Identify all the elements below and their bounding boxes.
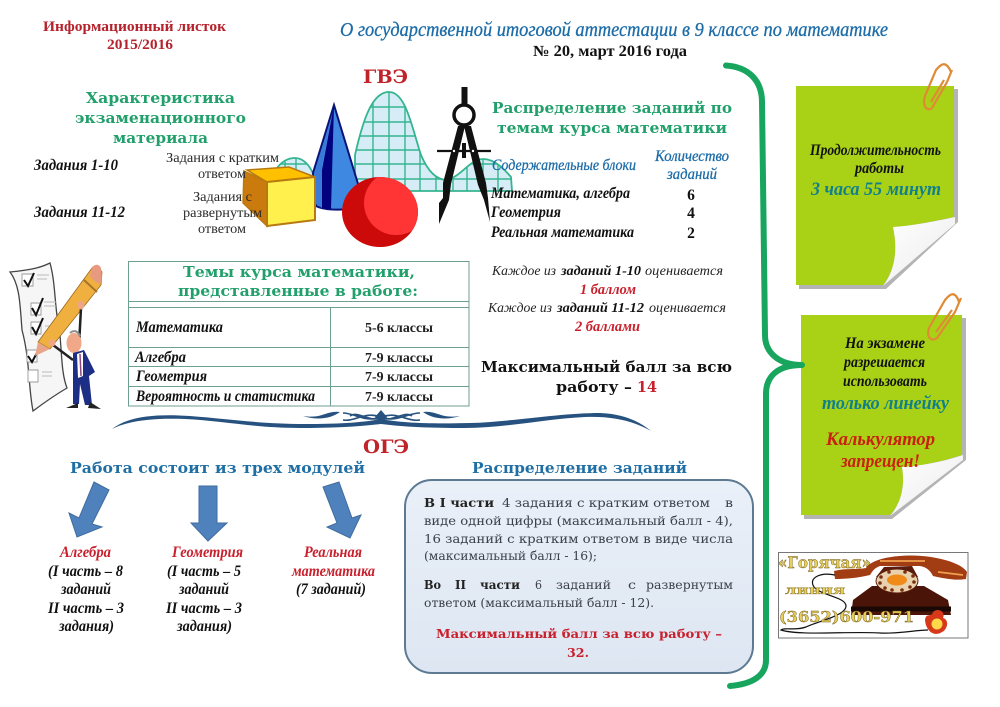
table rows: subjects: Геометрия bbox=[135, 368, 207, 385]
table rows: grades bbox=[365, 320, 433, 404]
OGE maximum score: 32. bbox=[567, 645, 589, 660]
topic rows bbox=[490, 185, 695, 242]
text block: scoring rules bbox=[487, 264, 726, 335]
arrow: to real mathematics bbox=[323, 482, 361, 538]
text block: scoring rules: 2 баллами bbox=[574, 319, 640, 335]
note text: использовать bbox=[843, 373, 927, 390]
labels: task types: развернутым bbox=[183, 205, 262, 220]
note text: 3 часа 55 минут bbox=[810, 179, 941, 200]
text block: GVE maximum score bbox=[481, 358, 732, 396]
heading: GVE: ГВЭ bbox=[363, 66, 408, 88]
part two text: 6 bbox=[535, 578, 542, 592]
heading: OGE: ОГЭ bbox=[363, 436, 409, 458]
hotline text: «Горячая» bbox=[778, 553, 871, 572]
part two text: с bbox=[628, 578, 636, 592]
text block: GVE maximum score: Максимальный балл за всю bbox=[481, 358, 732, 376]
part one text bbox=[424, 496, 733, 563]
module: algebra: Алгебра bbox=[59, 544, 111, 561]
note: duration bbox=[796, 64, 958, 289]
column headers: Количество bbox=[654, 148, 729, 165]
module: real mathematics: (7 заданий) bbox=[296, 581, 366, 598]
pencil bbox=[35, 265, 102, 356]
icon: cube bbox=[243, 167, 315, 226]
labels: task numbers: Задания 11-12 bbox=[33, 204, 125, 221]
column headers: Содержательные блоки bbox=[492, 157, 636, 174]
text block: GVE maximum score: 14 bbox=[637, 378, 657, 396]
module: geometry: заданий bbox=[178, 581, 229, 598]
heading: exam material characteristics: Характеристика bbox=[86, 89, 235, 107]
module: algebra: II часть – 3 bbox=[47, 600, 124, 617]
heading: exam material characteristics: материала bbox=[113, 129, 208, 147]
topic rows: 4 bbox=[687, 205, 695, 222]
text block: scoring rules: оценивается bbox=[645, 264, 723, 279]
column headers: заданий bbox=[666, 166, 717, 183]
part two text: ответом (максимальный балл - 12). bbox=[424, 596, 654, 610]
note text bbox=[822, 335, 950, 472]
sticky note sheet bbox=[801, 315, 966, 519]
part one text: 4 задания с кратким ответом bbox=[502, 496, 710, 510]
module: geometry: (I часть – 5 bbox=[167, 563, 241, 580]
part one text: виде одной цифры (максимальный балл - 4), bbox=[424, 514, 733, 528]
part one text: в bbox=[725, 496, 733, 510]
table rows: grades: 5-6 классы bbox=[365, 320, 433, 335]
heading: exam material characteristics: экзаменационного bbox=[75, 109, 246, 127]
part two text: части bbox=[480, 578, 520, 592]
panel: topics table bbox=[128, 262, 469, 406]
text block: scoring rules: 1 баллом bbox=[580, 282, 636, 298]
heading: distribution of tasks: Распределение заданий bbox=[472, 460, 687, 477]
part two text: II bbox=[455, 578, 466, 592]
table rows: subjects: Алгебра bbox=[134, 349, 186, 366]
checklist paper bbox=[10, 263, 67, 411]
table heading: представленные в работе: bbox=[178, 282, 418, 300]
labels: task types: Задания с кратким bbox=[166, 150, 279, 165]
hotline text bbox=[778, 553, 914, 626]
heading: distribution of tasks by course topics bbox=[492, 99, 732, 137]
module: algebra: (I часть – 8 bbox=[48, 563, 123, 580]
heading: distribution of tasks by course topics: Распределение заданий по bbox=[492, 99, 732, 117]
module: algebra: задания) bbox=[58, 618, 114, 635]
part one text: В I части bbox=[424, 496, 494, 510]
topic rows: 6 bbox=[687, 187, 695, 204]
part two text: развернутым bbox=[646, 578, 733, 592]
text block: scoring rules: заданий 1-10 bbox=[560, 264, 641, 279]
part two text: заданий bbox=[556, 578, 611, 592]
table heading: Темы курса математики, bbox=[183, 263, 415, 281]
OGE maximum score bbox=[436, 626, 722, 660]
module: real mathematics bbox=[291, 544, 375, 598]
part one text: (максимальный балл - 16); bbox=[424, 549, 597, 563]
icon: sphere bbox=[342, 177, 418, 247]
labels: task types: Задания с bbox=[193, 189, 252, 204]
module: algebra: заданий bbox=[60, 581, 111, 598]
note text: Калькулятор bbox=[825, 429, 935, 450]
OGE maximum score: Максимальный балл за всю работу – bbox=[436, 626, 722, 641]
labels: task numbers: Задания 1-10 bbox=[33, 157, 118, 174]
panel: OGE task distribution bbox=[405, 480, 753, 673]
module: algebra bbox=[47, 544, 124, 635]
main title: № 20, март 2016 года bbox=[533, 43, 687, 60]
module: real mathematics: математика bbox=[291, 563, 375, 580]
note text: разрешается bbox=[842, 354, 925, 371]
labels: task types bbox=[166, 150, 279, 236]
topic rows: 2 bbox=[687, 225, 695, 242]
table rows: grades: 7-9 классы bbox=[365, 369, 433, 384]
note text: только линейку bbox=[822, 393, 950, 414]
icon: cone bbox=[313, 105, 362, 210]
panel: hotline bbox=[778, 552, 968, 638]
table rows: subjects: Вероятность и статистика bbox=[135, 388, 315, 405]
note text: На экзамене bbox=[844, 335, 925, 352]
note text: Продолжительность bbox=[809, 142, 941, 159]
part one text: 16 заданий с кратким ответом в виде числа bbox=[424, 532, 733, 546]
main title bbox=[340, 19, 888, 60]
header label: information sheet bbox=[43, 19, 226, 53]
text block: scoring rules: Каждое из bbox=[487, 301, 553, 316]
table rows: grades: 7-9 классы bbox=[365, 389, 433, 404]
text block: scoring rules: оценивается bbox=[649, 301, 726, 316]
arrow: to algebra bbox=[69, 482, 109, 537]
labels: task types: ответом bbox=[198, 221, 246, 236]
icon: paperclip bbox=[924, 64, 952, 109]
graphic: bell curve chart bbox=[270, 90, 520, 191]
table rows: subjects bbox=[134, 319, 315, 405]
part two text: Во bbox=[424, 578, 441, 592]
heading: exam material characteristics bbox=[75, 89, 246, 147]
main title: О государственной итоговой аттестации в 9 классе по математике bbox=[340, 19, 888, 41]
icon: paperclip bbox=[928, 294, 961, 340]
labels: task types: ответом bbox=[198, 166, 246, 181]
icon: compass bbox=[437, 87, 491, 224]
table rows: grades: 7-9 классы bbox=[365, 350, 433, 365]
hotline text: (3652)600-971 bbox=[779, 608, 914, 626]
topic rows: Геометрия bbox=[490, 204, 561, 221]
table rows: subjects: Математика bbox=[135, 319, 223, 336]
hotline text: линия bbox=[785, 583, 845, 597]
green curly brace bbox=[726, 66, 802, 686]
note text bbox=[809, 142, 941, 200]
topic rows: Реальная математика bbox=[491, 224, 634, 241]
sticky note sheet bbox=[796, 86, 958, 289]
module: real mathematics: Реальная bbox=[304, 544, 362, 561]
illustration: man with pencil and checklist bbox=[10, 263, 102, 411]
man figure bbox=[48, 300, 101, 409]
header label: information sheet: 2015/2016 bbox=[107, 37, 174, 53]
heading: distribution of tasks by course topics: темам курса математики bbox=[497, 119, 727, 137]
header label: information sheet: Информационный листок bbox=[43, 19, 226, 35]
note: allowed tools bbox=[801, 294, 966, 519]
note text: работы bbox=[853, 160, 904, 177]
text block: GVE maximum score: работу – bbox=[556, 378, 632, 396]
note text: запрещен! bbox=[840, 451, 920, 472]
icon: flame bbox=[925, 610, 947, 634]
icon: telephone bbox=[781, 556, 967, 633]
ornament divider bbox=[112, 410, 651, 431]
text block: scoring rules: заданий 11-12 bbox=[556, 301, 644, 316]
module: geometry bbox=[165, 544, 243, 635]
panel: distribution by topics bbox=[490, 99, 732, 242]
column headers bbox=[492, 148, 729, 183]
labels: task numbers bbox=[33, 157, 125, 221]
module: geometry: II часть – 3 bbox=[165, 600, 242, 617]
module: geometry: задания) bbox=[176, 618, 232, 635]
table heading bbox=[178, 263, 418, 300]
module: geometry: Геометрия bbox=[171, 544, 243, 561]
topic rows: Математика, алгебра bbox=[490, 185, 630, 202]
heading: three modules: Работа состоит из трех модулей bbox=[70, 460, 365, 477]
arrow: to geometry bbox=[191, 486, 227, 541]
part two text bbox=[424, 578, 733, 610]
text block: scoring rules: Каждое из bbox=[491, 264, 557, 279]
